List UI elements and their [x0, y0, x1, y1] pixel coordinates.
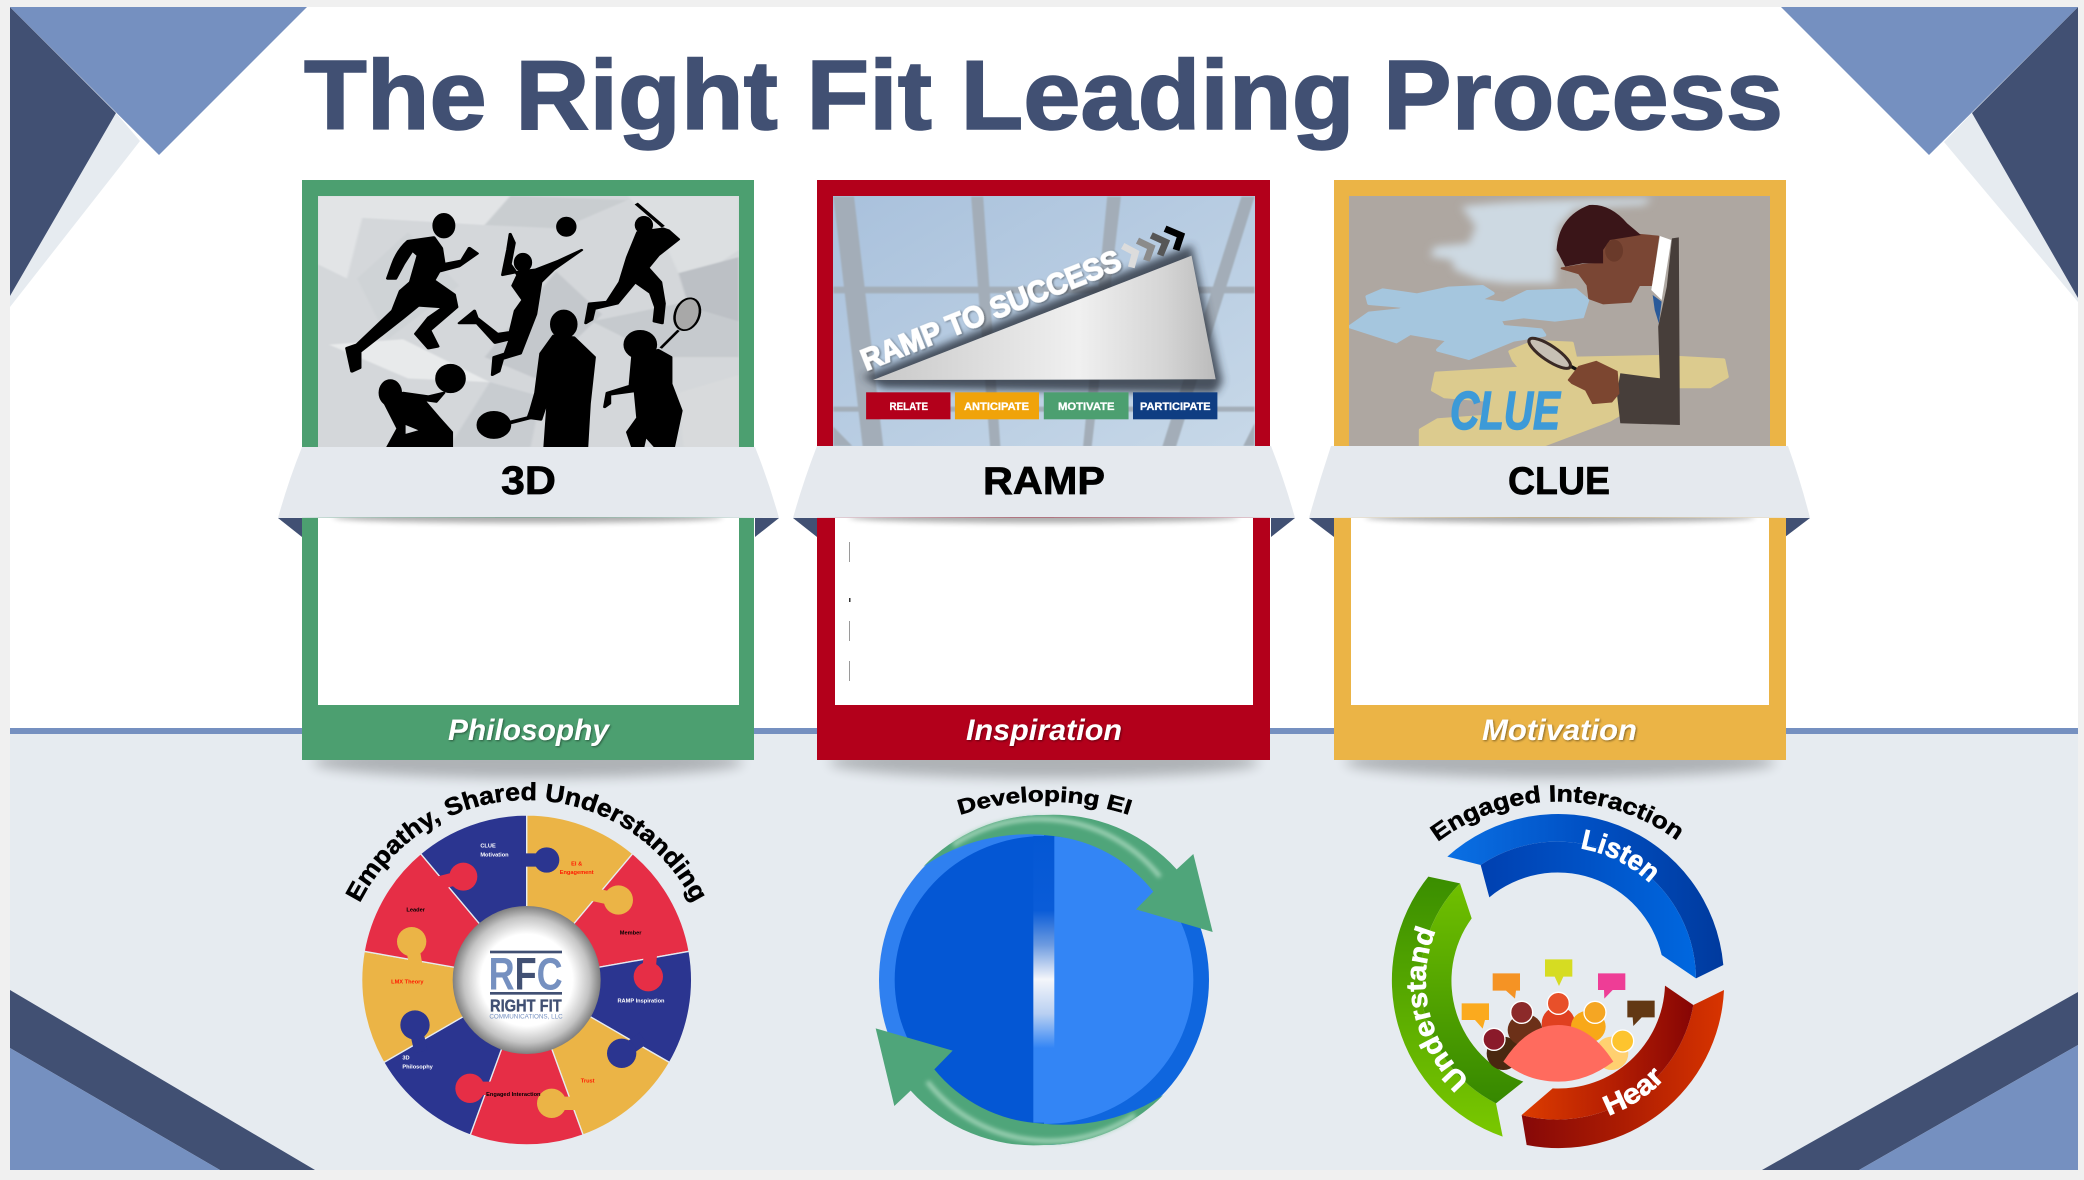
image: athletes silhouettes [318, 196, 739, 447]
segment labels: Motivation [480, 852, 509, 858]
icon: man with magnifier [1525, 205, 1680, 425]
tag: motivate [1044, 392, 1129, 419]
slide upper white area [10, 7, 2078, 730]
ribbon: RAMP: RAMP [983, 460, 1105, 503]
icon: tennis player with racket [478, 311, 594, 447]
segment labels: Member [620, 931, 642, 937]
segment labels: Leader [406, 908, 426, 914]
chart: engaged interaction ring [1392, 785, 1724, 1148]
segment labels: Engagement [560, 870, 594, 876]
curved heading: Developing EI: Developing EI [957, 786, 1132, 815]
icon: crouching player [380, 365, 464, 447]
bottom-right corner decoration [1762, 992, 2078, 1170]
panel: 3D card [278, 180, 779, 778]
segment labels: Trust [581, 1078, 595, 1084]
segment labels: Engaged Interaction [486, 1092, 541, 1098]
segment labels: CLUE [480, 844, 496, 850]
segment labels: Philosophy [402, 1064, 434, 1070]
footer label: Philosophy: Philosophy [448, 714, 610, 747]
horizontal divider line [10, 728, 2078, 734]
ribbon: 3D: 3D [501, 459, 556, 503]
ramp shadow [863, 245, 1223, 393]
tag labels [890, 402, 1210, 410]
icon: runner [347, 214, 477, 371]
faint cursor marks [849, 542, 850, 681]
tag: relate [866, 392, 950, 419]
blue disc [879, 815, 1209, 1145]
footer label: Motivation: Motivation [1482, 714, 1637, 747]
top-left corner decoration [10, 7, 307, 307]
arrow: upper green [923, 815, 1213, 932]
text: ramp to success: RAMP TO SUCCESS [856, 243, 1126, 378]
tag labels: ANTICIPATE [964, 401, 1029, 413]
segment labels: EI & [571, 861, 582, 867]
puzzle segments [362, 815, 692, 1145]
icon: batter [586, 204, 679, 323]
speech bubbles [1462, 959, 1655, 1029]
segment labels: RAMP Inspiration [617, 998, 665, 1004]
puzzle piece: blue [1350, 287, 1588, 358]
ribbon: CLUE: CLUE [1508, 460, 1610, 503]
tag labels: MOTIVATE [1058, 401, 1114, 413]
slide lower grey band [10, 734, 2078, 1170]
panel: RAMP card [793, 180, 1295, 778]
chevrons [1123, 229, 1181, 267]
puzzle knobs [397, 847, 663, 1118]
puzzle piece: yellow [1421, 342, 1727, 446]
image: ramp to success [833, 196, 1255, 447]
ribbon: 3D [278, 447, 779, 518]
ribbon: CLUE [1309, 446, 1810, 518]
segment labels [391, 844, 665, 1098]
icon: woman with racket [605, 297, 703, 447]
text: CLUE logo: CLUE [1450, 381, 1561, 441]
arc: Hear: Hear [1602, 1068, 1662, 1116]
chart: puzzle wheel [345, 782, 705, 1144]
tag: anticipate [955, 392, 1039, 419]
icon: group conversation [1462, 959, 1655, 1082]
tag labels: PARTICIPATE [1140, 401, 1211, 413]
arc: Hear [1522, 986, 1724, 1148]
curved heading: Empathy, Shared Understanding: Empathy, Shared Understanding [345, 782, 705, 902]
arc: Listen: Listen [1581, 829, 1657, 882]
top-right corner decoration [1781, 7, 2078, 302]
title: The Right Fit Leading Process [304, 40, 1783, 150]
bottom-left corner decoration [10, 990, 315, 1170]
curved heading: Engaged Interaction: Engaged Interaction [1430, 785, 1682, 842]
panel: CLUE card [1309, 180, 1810, 778]
ribbon: RAMP [793, 446, 1295, 518]
center logo orb: COMMUNICATIONS, LLC [489, 1014, 563, 1020]
center logo orb [453, 906, 601, 1054]
image: detective with puzzle [1349, 196, 1770, 447]
arc: Understand [1392, 876, 1524, 1137]
arrow: lower green [876, 1028, 1163, 1145]
center logo orb: RFC [489, 948, 563, 999]
arc: Understand: Understand [1407, 926, 1466, 1093]
segment labels: 3D [402, 1056, 410, 1062]
arc: Listen [1447, 814, 1724, 978]
ramp plate [873, 256, 1216, 380]
icon: volleyball player [459, 218, 582, 375]
center logo orb: RIGHT FIT [490, 996, 562, 1016]
tag: participate [1133, 392, 1217, 419]
tag labels: RELATE [890, 401, 928, 413]
chart: developing EI circle [876, 786, 1213, 1146]
segment labels: LMX Theory [391, 979, 424, 985]
footer label: Inspiration: Inspiration [966, 714, 1122, 747]
